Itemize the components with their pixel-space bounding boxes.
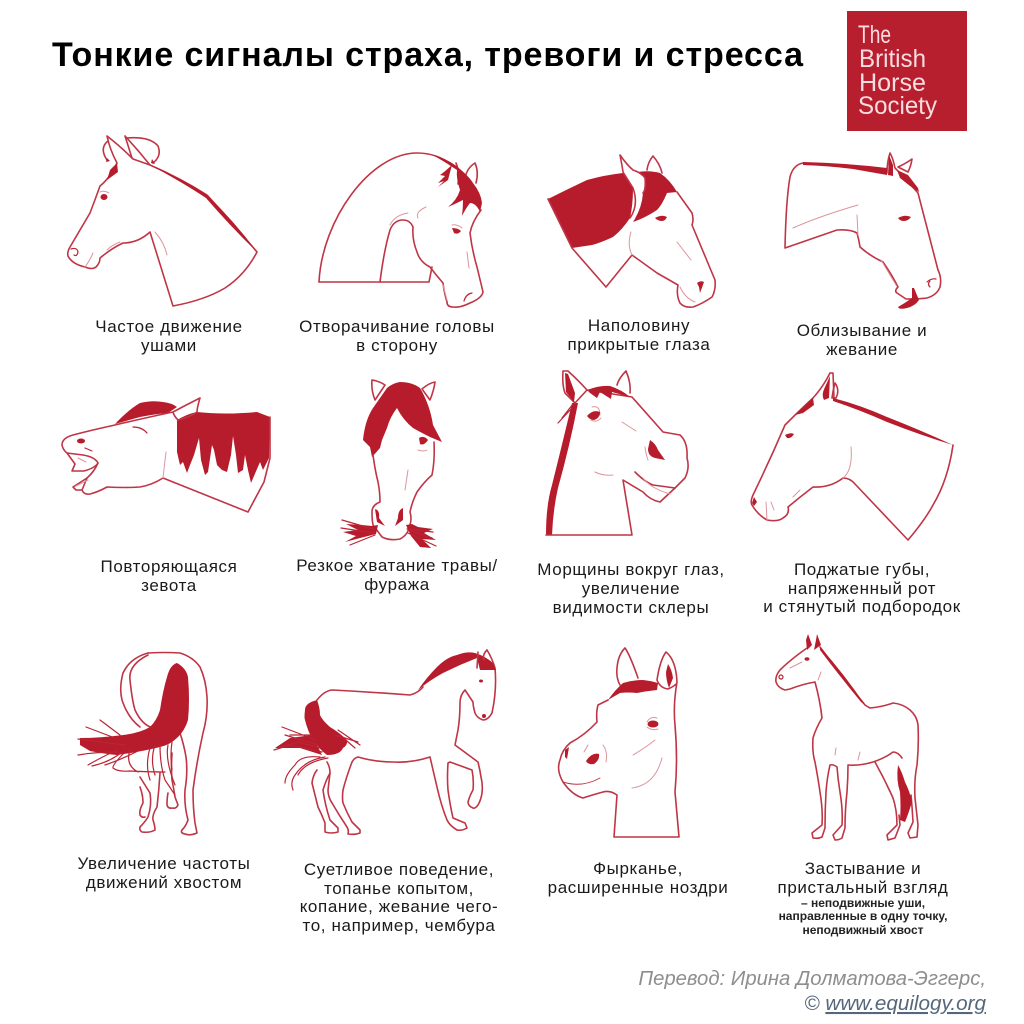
horse head turned aside bbox=[319, 153, 483, 307]
horse head with tongue bbox=[785, 153, 941, 309]
caption: прикрытые глаза bbox=[567, 335, 711, 354]
caption: Отворачивание головы bbox=[299, 317, 495, 336]
caption: и стянутый подбородок bbox=[763, 597, 961, 616]
caption: Суетливое поведение, bbox=[304, 860, 494, 879]
caption: в сторону bbox=[356, 336, 438, 355]
translator credit: Перевод: Ирина Долматова-Эггерс, bbox=[638, 968, 986, 990]
caption: напряженный рот bbox=[788, 579, 936, 598]
caption: фуража bbox=[364, 575, 430, 594]
title: Тонкие сигналы страха, тревоги и стресса bbox=[52, 36, 804, 74]
logo: The British Horse Society: British bbox=[859, 45, 926, 73]
panel: turning head away bbox=[299, 153, 495, 355]
caption: Облизывание и bbox=[797, 321, 927, 340]
panel: snorting and flared nostrils bbox=[548, 648, 728, 897]
caption: копание, жевание чего- bbox=[300, 897, 498, 916]
panel: frequent ear movement bbox=[68, 136, 257, 355]
caption: расширенные ноздри bbox=[548, 878, 728, 897]
website credit: © www.equilogy.org bbox=[804, 992, 986, 1015]
horse head from front with grass bbox=[341, 380, 442, 548]
panel: tight lips and chin bbox=[751, 373, 961, 616]
yawning horse head bbox=[62, 398, 270, 512]
caption: Поджатые губы, bbox=[794, 560, 930, 579]
whole horse pawing the ground bbox=[274, 650, 496, 834]
caption: Повторяющаяся bbox=[100, 557, 238, 576]
caption: пристальный взгляд bbox=[778, 878, 948, 897]
caption: увеличение bbox=[582, 579, 680, 598]
startled horse head bbox=[546, 371, 688, 535]
logo: The British Horse Society bbox=[847, 11, 967, 131]
caption: ушами bbox=[141, 336, 197, 355]
caption: Фырканье, bbox=[593, 859, 683, 878]
panel: freezing and staring bbox=[776, 634, 948, 937]
panel: eye wrinkles and visible sclera bbox=[537, 371, 725, 617]
sub-caption: неподвижный хвост bbox=[802, 923, 924, 937]
caption: топанье копытом, bbox=[324, 879, 474, 898]
sub-caption: – неподвижные уши, bbox=[801, 896, 925, 910]
panel: increased tail movement bbox=[77, 652, 251, 892]
logo: The British Horse Society: The bbox=[858, 21, 891, 49]
horse from behind with swishing tail bbox=[78, 652, 207, 835]
panel: licking and chewing bbox=[785, 153, 941, 359]
horse head with ear motion arrows bbox=[68, 136, 257, 306]
panel: abrupt grass snatching bbox=[296, 380, 498, 594]
horse head with flared nostrils bbox=[559, 648, 679, 837]
caption: Резкое хватание травы/ bbox=[296, 556, 498, 575]
caption: движений хвостом bbox=[86, 873, 242, 892]
horse head with half-closed eye bbox=[548, 155, 715, 307]
caption: Застывание и bbox=[805, 859, 921, 878]
caption: Наполовину bbox=[588, 316, 690, 335]
caption: то, например, чембура bbox=[303, 916, 495, 935]
panel: half-closed eyes bbox=[548, 155, 715, 354]
caption: Частое движение bbox=[95, 317, 243, 336]
panel: repeated yawning bbox=[62, 398, 270, 595]
caption: жевание bbox=[826, 340, 898, 359]
panel: restless behaviour bbox=[274, 650, 498, 935]
logo: The British Horse Society: Society bbox=[858, 92, 937, 120]
caption: Увеличение частоты bbox=[77, 854, 251, 873]
whole horse standing still bbox=[776, 634, 918, 840]
logo: The British Horse Society: Horse bbox=[859, 69, 926, 97]
sub-caption: направленные в одну точку, bbox=[779, 909, 947, 923]
caption: Морщины вокруг глаз, bbox=[537, 560, 725, 579]
caption: видимости склеры bbox=[553, 598, 709, 617]
horse head with tight mouth bbox=[751, 373, 953, 540]
caption: зевота bbox=[141, 576, 197, 595]
